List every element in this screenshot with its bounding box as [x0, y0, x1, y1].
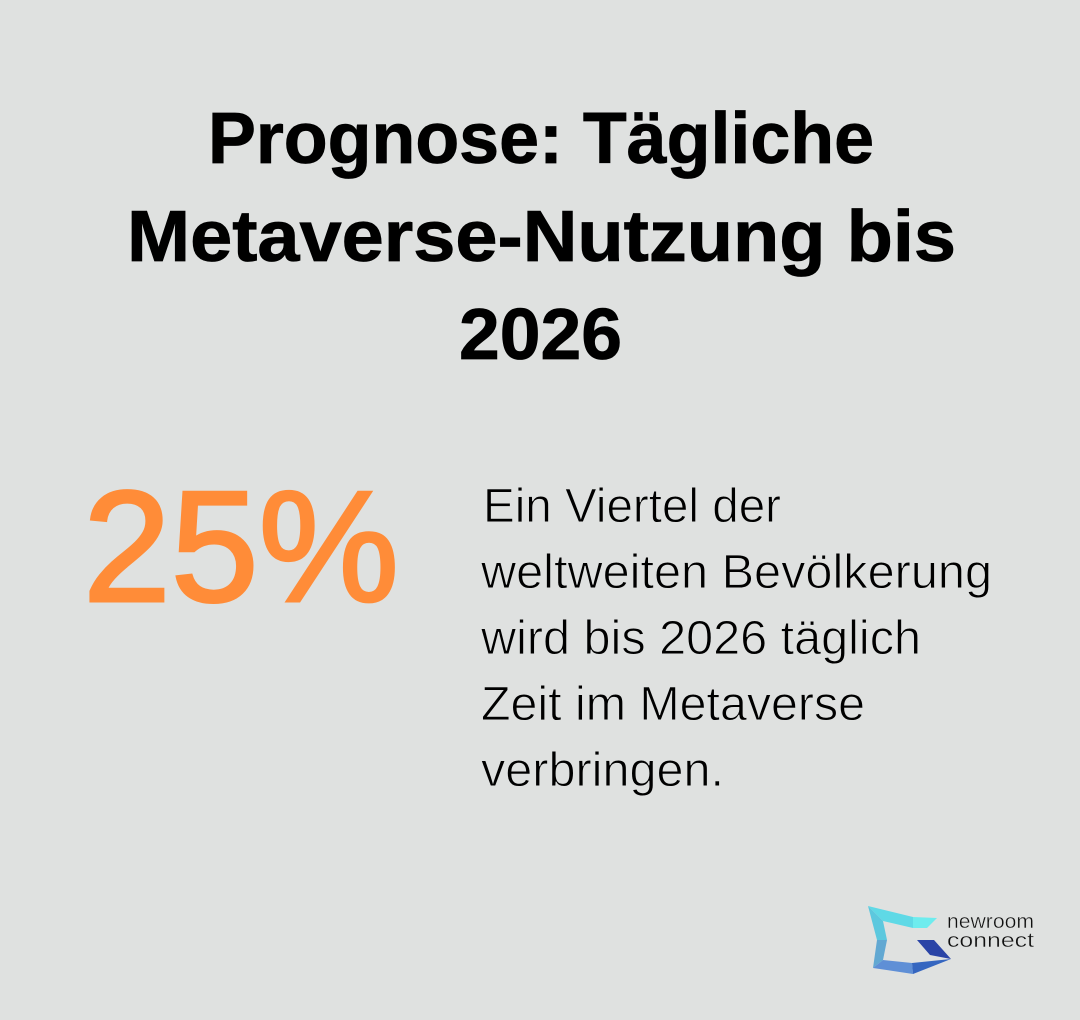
- logo icon: [868, 906, 951, 974]
- title: [127, 99, 956, 375]
- title: Prognose: Tägliche: [208, 99, 874, 179]
- description text: [480, 480, 992, 797]
- description text: weltweiten Bevölkerung: [480, 546, 992, 599]
- logo wordmark: newroom: [947, 910, 1034, 933]
- statistic: 25%: 25%: [83, 459, 399, 635]
- title: Metaverse-Nutzung bis: [127, 197, 956, 277]
- description text: Ein Viertel der: [483, 480, 781, 533]
- logo wordmark: [947, 910, 1034, 952]
- description text: Zeit im Metaverse: [481, 678, 865, 731]
- logo: newroom connect: [868, 906, 1034, 974]
- description text: wird bis 2026 täglich: [480, 612, 921, 665]
- description text: verbringen.: [481, 744, 724, 797]
- logo wordmark: connect: [947, 929, 1034, 952]
- title: 2026: [459, 295, 622, 375]
